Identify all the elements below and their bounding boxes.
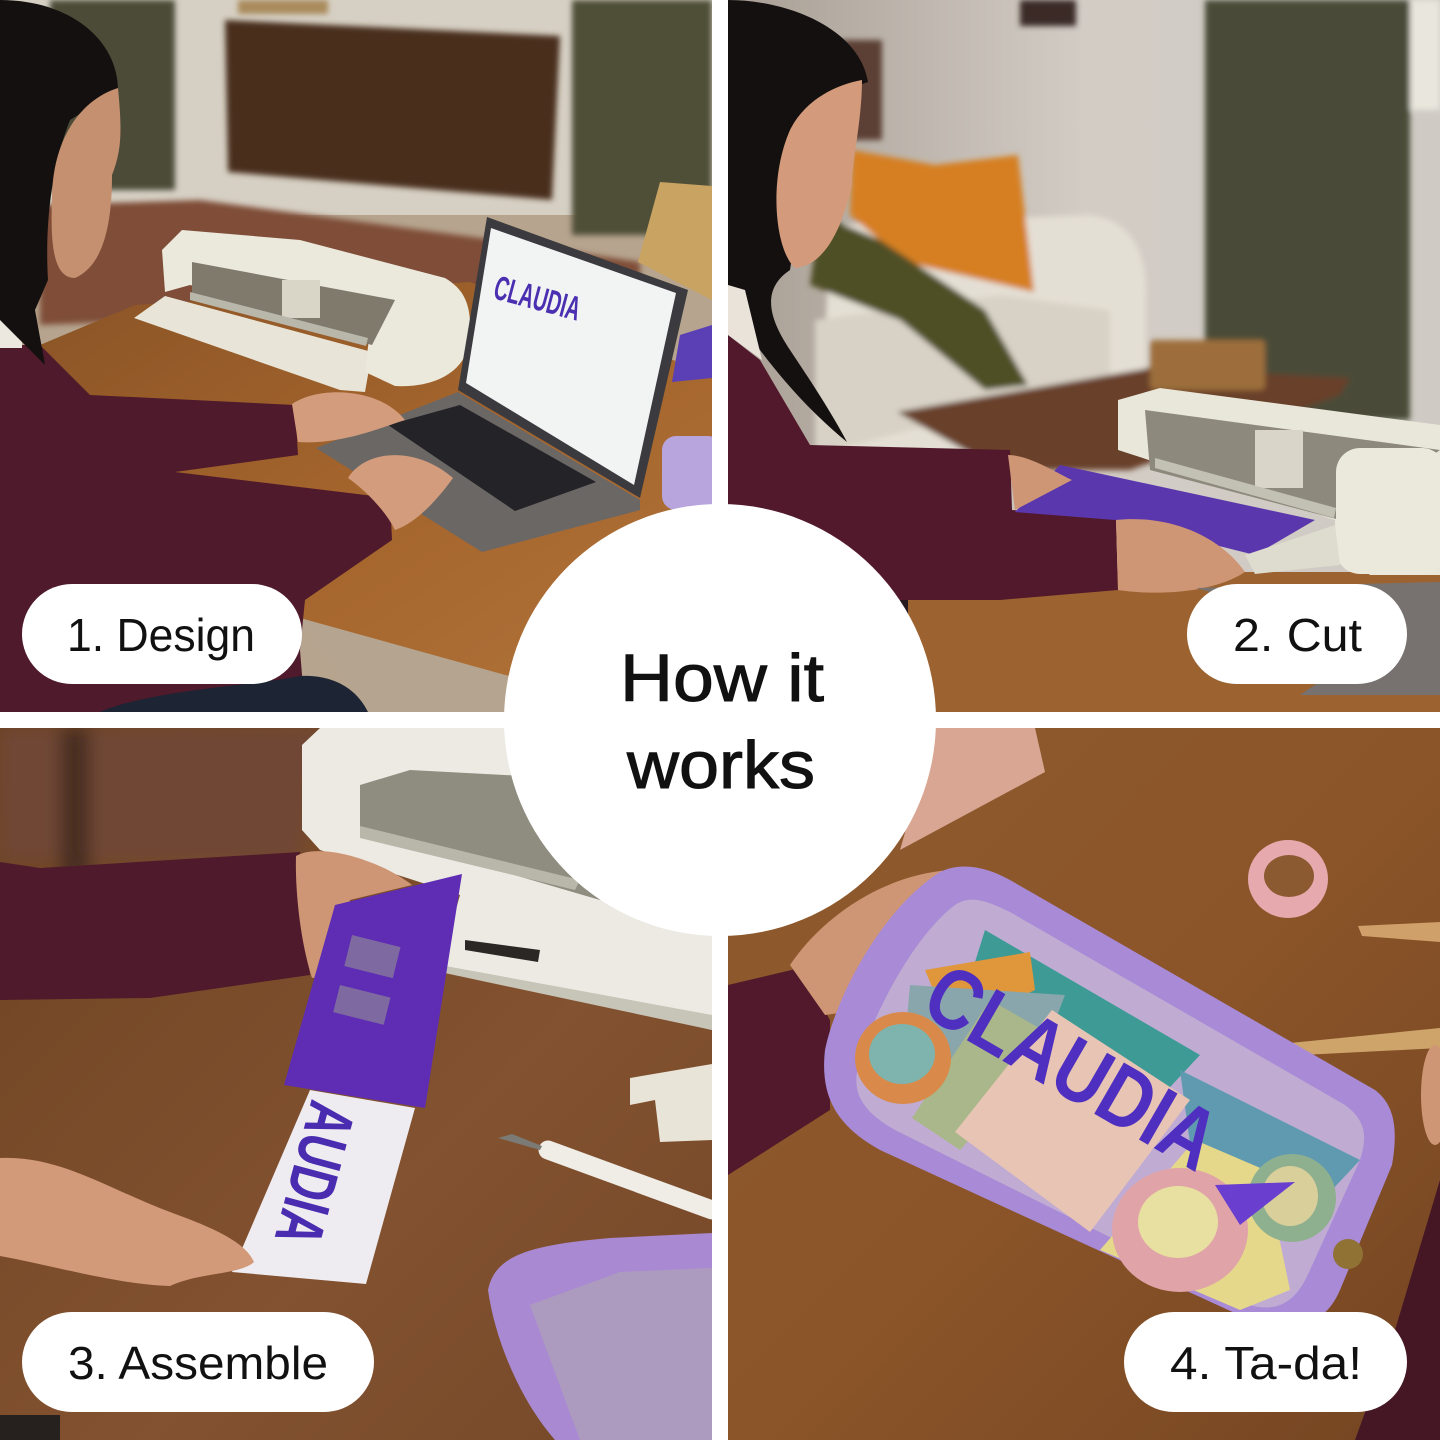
label: 4. Ta-da! <box>1124 1312 1407 1412</box>
sofa <box>820 215 1146 460</box>
label: 2. Cut: 2. Cut <box>1233 609 1362 661</box>
clear pouch <box>824 866 1395 1327</box>
hair and face <box>728 0 868 442</box>
label: 4. Ta-da!: 4. Ta-da! <box>1170 1337 1362 1389</box>
transferred lettering on strip: AUDIA <box>261 1094 370 1254</box>
label: 1. Design <box>22 584 302 684</box>
heading: works <box>626 728 815 803</box>
side table and basket <box>897 368 1350 470</box>
table <box>900 572 1440 712</box>
purple sheet and pouch <box>672 325 712 382</box>
weeding tool <box>548 1150 712 1210</box>
laptop <box>316 217 688 552</box>
backing strip <box>232 1090 415 1284</box>
vinyl name lettering: CLAUDIA <box>908 945 1235 1189</box>
right arm <box>1355 1180 1440 1440</box>
notebook <box>900 728 1045 850</box>
label: 2. Cut <box>1187 584 1407 684</box>
sleeve and hand <box>728 968 830 1175</box>
hands <box>292 392 405 442</box>
chair <box>638 182 712 300</box>
pillow <box>850 150 1034 292</box>
cutting machine <box>1118 388 1440 575</box>
panel: step 4 ta-da photo <box>728 728 1440 1440</box>
purple sheet <box>1015 465 1315 555</box>
pouch contents <box>975 930 1200 1087</box>
cutting machine <box>134 230 470 392</box>
throw <box>810 215 1028 390</box>
hair and face <box>0 0 118 365</box>
centre circle <box>504 504 936 936</box>
peeled purple vinyl <box>284 874 462 1108</box>
label: 3. Assemble: 3. Assemble <box>68 1337 328 1389</box>
left hand <box>0 1158 254 1286</box>
sweater <box>728 335 1118 600</box>
purple pouch <box>488 1233 712 1440</box>
table <box>40 282 712 712</box>
label: 1. Design: 1. Design <box>67 609 255 661</box>
paper roll <box>630 1064 712 1142</box>
panel: step 2 cut photo <box>728 0 1440 712</box>
cutting machine <box>302 728 712 1030</box>
label: 3. Assemble <box>22 1312 374 1412</box>
panel: step 1 design photo <box>0 0 722 712</box>
heading: How it <box>620 641 824 716</box>
heading <box>620 641 824 803</box>
pencils <box>1358 922 1440 942</box>
sleeve <box>0 852 310 1000</box>
panel: step 3 assemble photo <box>0 728 712 1440</box>
sweater and person <box>0 345 392 712</box>
laptop <box>1196 582 1440 695</box>
washi tape <box>1248 840 1328 918</box>
tape rolls <box>855 1012 951 1104</box>
laptop screen design: CLAUDIA <box>490 269 585 329</box>
hand lifting vinyl <box>296 851 412 978</box>
hands <box>1116 519 1245 593</box>
